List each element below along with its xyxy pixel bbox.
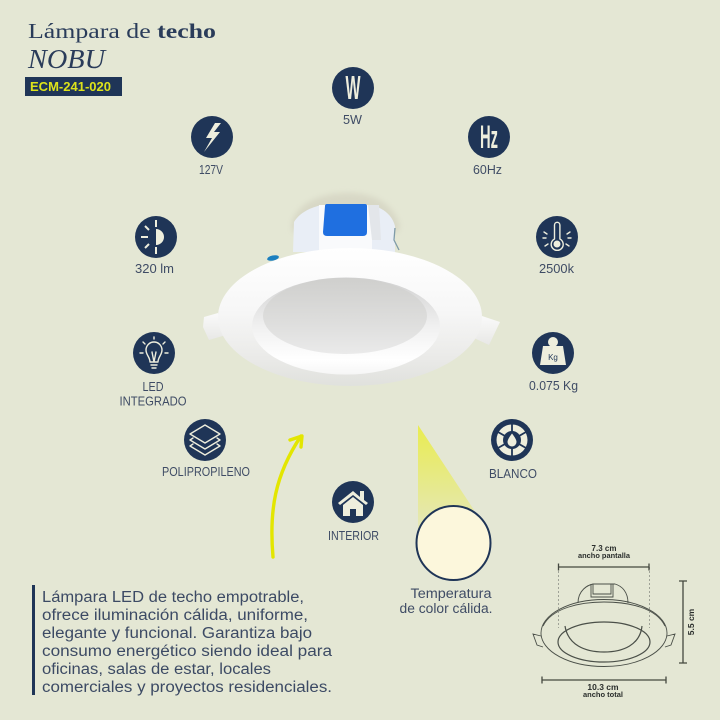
description text: oficinas, salas de estar, locales	[42, 661, 271, 678]
spec: frequency	[468, 116, 510, 177]
spec: LED integrated	[120, 332, 187, 408]
colour temperature swatch	[416, 506, 490, 580]
spec: weight: 0.075 Kg	[529, 379, 578, 393]
description text	[42, 589, 332, 696]
dimension diagram: 7.3 cm	[592, 544, 616, 553]
spec: voltage: 127V	[199, 163, 224, 177]
colour temperature caption: Temperatura	[410, 586, 492, 601]
description text: ofrece iluminación cálida, uniforme,	[42, 607, 308, 624]
model code badge: ECM-241-020	[30, 80, 111, 94]
dimension diagram: ancho pantalla	[578, 553, 630, 560]
spec: weight	[529, 332, 578, 393]
spec: indoor use: INTERIOR	[328, 529, 379, 543]
spec: luminous flux: 320 lm	[135, 262, 174, 276]
dimension diagram: 5.5 cm	[686, 608, 696, 635]
product name: NOBU	[27, 44, 107, 74]
description text: comerciales y proyectos residenciales.	[42, 679, 332, 696]
spec: frequency: Hz	[480, 119, 498, 155]
yellow arrow	[272, 436, 302, 557]
spec: power: 5W	[343, 113, 362, 127]
spec: power: W	[346, 69, 361, 106]
spec: temperature	[536, 216, 578, 276]
product photo: recessed lamp	[203, 193, 500, 386]
dimension diagram	[533, 544, 696, 699]
spec: material	[162, 419, 250, 479]
description text: Lámpara LED de techo empotrable,	[42, 589, 304, 606]
spec: colour	[489, 419, 537, 481]
spec: luminous flux	[135, 216, 177, 276]
dimension diagram: 10.3 cm	[587, 682, 619, 692]
spec: colour: BLANCO	[489, 467, 537, 481]
spec: weight: Kg	[548, 353, 558, 362]
spec: temperature: 2500k	[539, 262, 575, 276]
spec: material: POLIPROPILENO	[162, 465, 250, 479]
title: Lámpara de techo	[28, 19, 216, 43]
spec: voltage	[191, 116, 233, 177]
spec: power	[332, 67, 374, 127]
spec: LED integrated: INTEGRADO	[120, 394, 187, 408]
spec: indoor use	[328, 481, 379, 543]
description text: elegante y funcional. Garantiza bajo	[42, 625, 312, 642]
spec: frequency: 60Hz	[473, 163, 502, 177]
spec: LED integrated: LED	[142, 380, 164, 394]
colour temperature caption: de color cálida.	[400, 601, 492, 616]
description text: consumo energético siendo ideal para	[42, 643, 332, 660]
model code badge	[25, 77, 122, 96]
colour temperature caption	[400, 586, 492, 616]
dimension diagram: ancho total	[583, 692, 623, 699]
description bar	[32, 585, 35, 695]
light cone	[418, 425, 474, 540]
